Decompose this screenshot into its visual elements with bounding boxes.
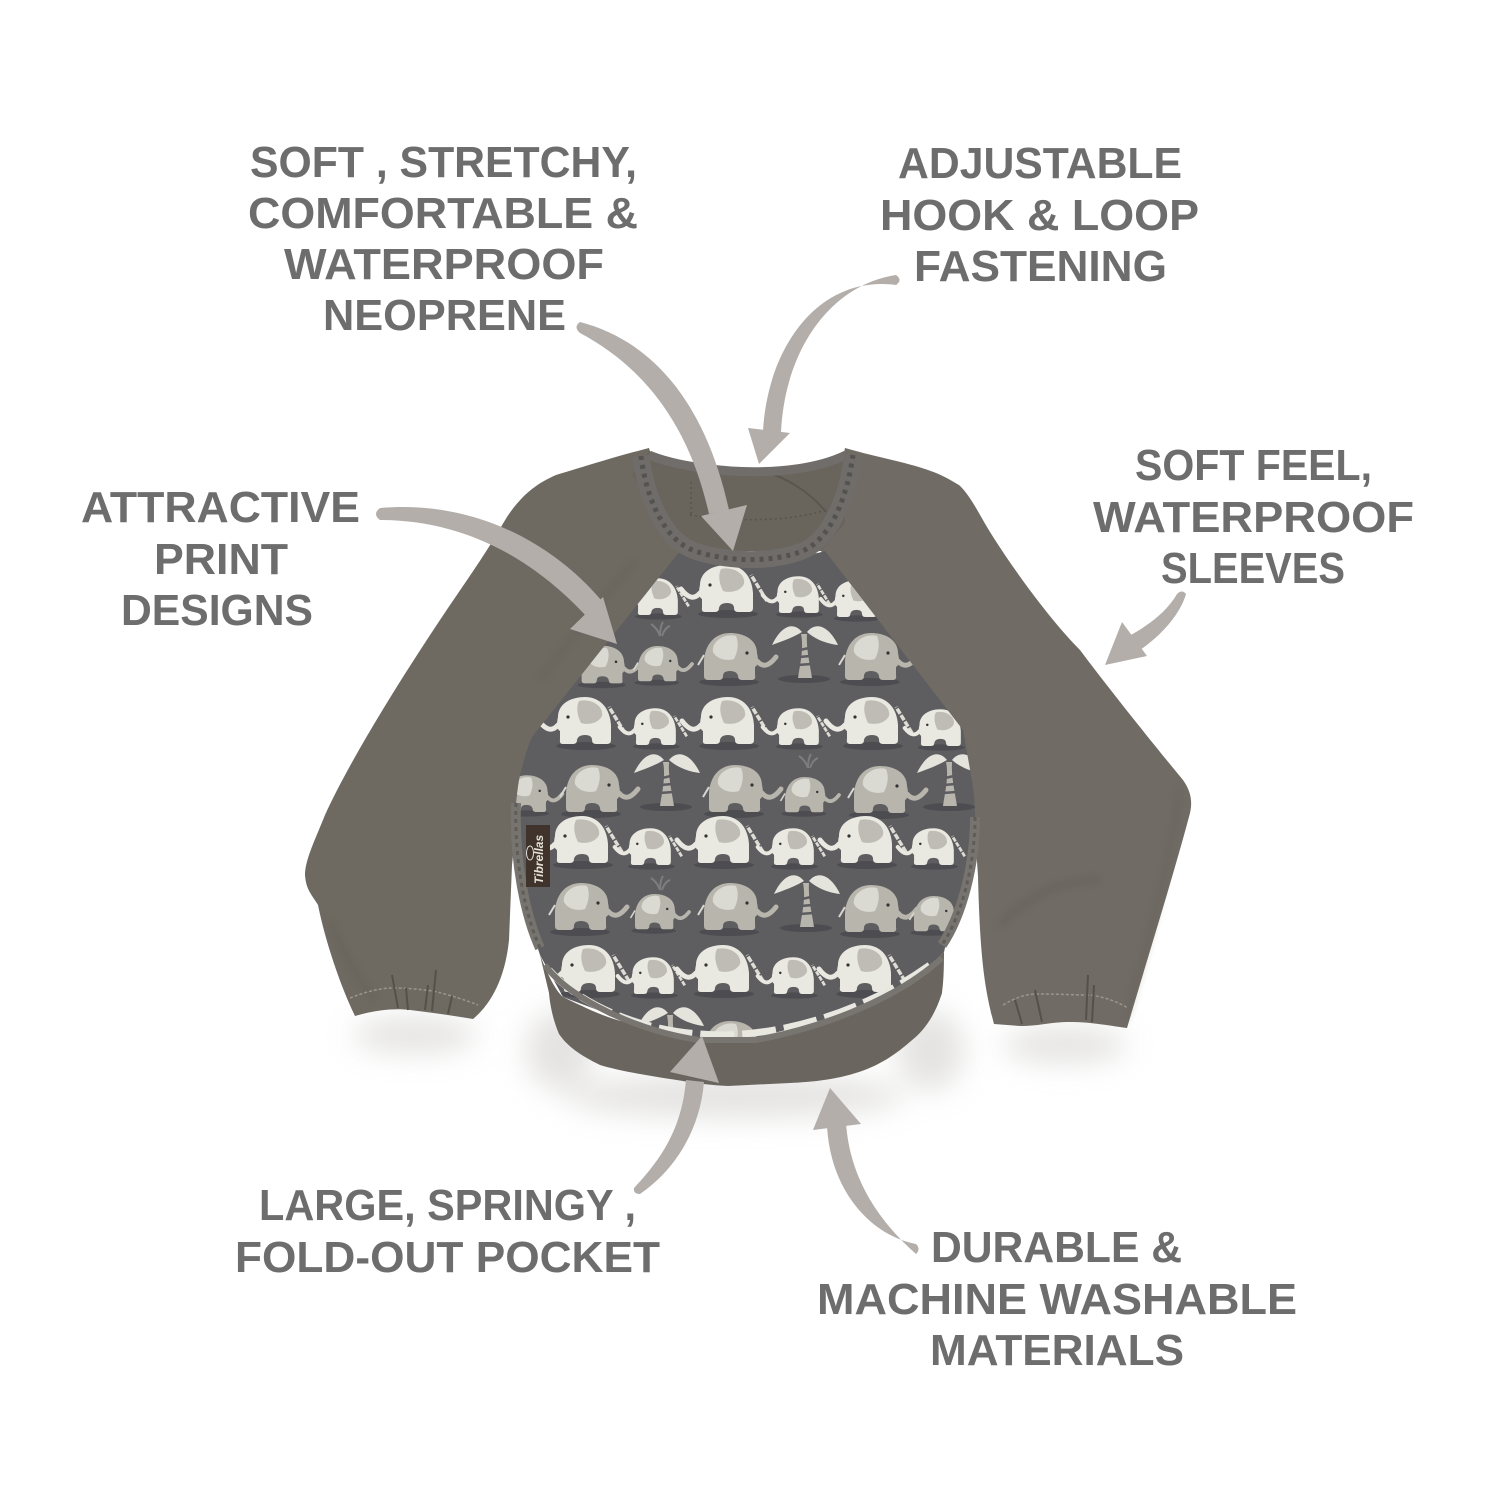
left sleeve [305,448,680,1019]
side bindings [516,803,975,948]
callout: washable [817,1223,1297,1375]
callout: pocket: FOLD-OUT POCKET [235,1233,660,1282]
arrow: neoprene [576,322,747,551]
callout: fastening [880,139,1199,291]
garment shadow [353,1010,1127,1118]
fold-out pocket [540,952,944,1086]
callout: fastening: HOOK & LOOP [880,191,1199,240]
callout: sleeves [1093,441,1414,593]
callout: fastening: FASTENING [914,242,1167,291]
right sleeve [821,448,1191,1028]
right cuff gathers [1003,975,1128,1024]
callout: neoprene: COMFORTABLE & [248,189,638,238]
callout: print designs: DESIGNS [121,586,313,635]
arrow: print designs [376,507,617,644]
callout: sleeves: SLEEVES [1161,544,1345,593]
infographic: bib with feature callouts [82,146,1412,1366]
callout: print designs: ATTRACTIVE [81,483,360,532]
bib garment [305,448,1191,1086]
printed bib panel [516,551,975,1037]
pocket inner strip [549,965,930,1035]
brand tag: Tibrellas [532,835,546,884]
callout: neoprene: SOFT , STRETCHY, [250,138,637,187]
callout: print designs: PRINT [154,535,288,584]
callout: neoprene [248,138,638,340]
arrow: fastening [748,275,900,464]
callout: print designs [81,483,360,635]
arrow: pocket [634,1036,719,1194]
callout: washable: MACHINE WASHABLE [817,1275,1297,1324]
callout: sleeves: SOFT FEEL, [1135,441,1372,490]
callout: neoprene: WATERPROOF [284,240,604,289]
callout: neoprene: NEOPRENE [323,291,566,340]
callout: sleeves: WATERPROOF [1093,493,1414,542]
callout: washable: DURABLE & [931,1223,1182,1272]
brand tag [526,825,550,887]
arrow: washable [813,1088,918,1254]
callout: pocket [235,1181,660,1282]
arrow: sleeves [1105,592,1186,665]
callout: washable: MATERIALS [930,1326,1184,1375]
collar binding [641,455,853,560]
back of neck [632,451,845,551]
left cuff gathers [350,970,478,1014]
sleeve folds [330,560,1180,1020]
callout: fastening: ADJUSTABLE [898,139,1182,188]
callout: pocket: LARGE, SPRINGY , [259,1181,636,1230]
